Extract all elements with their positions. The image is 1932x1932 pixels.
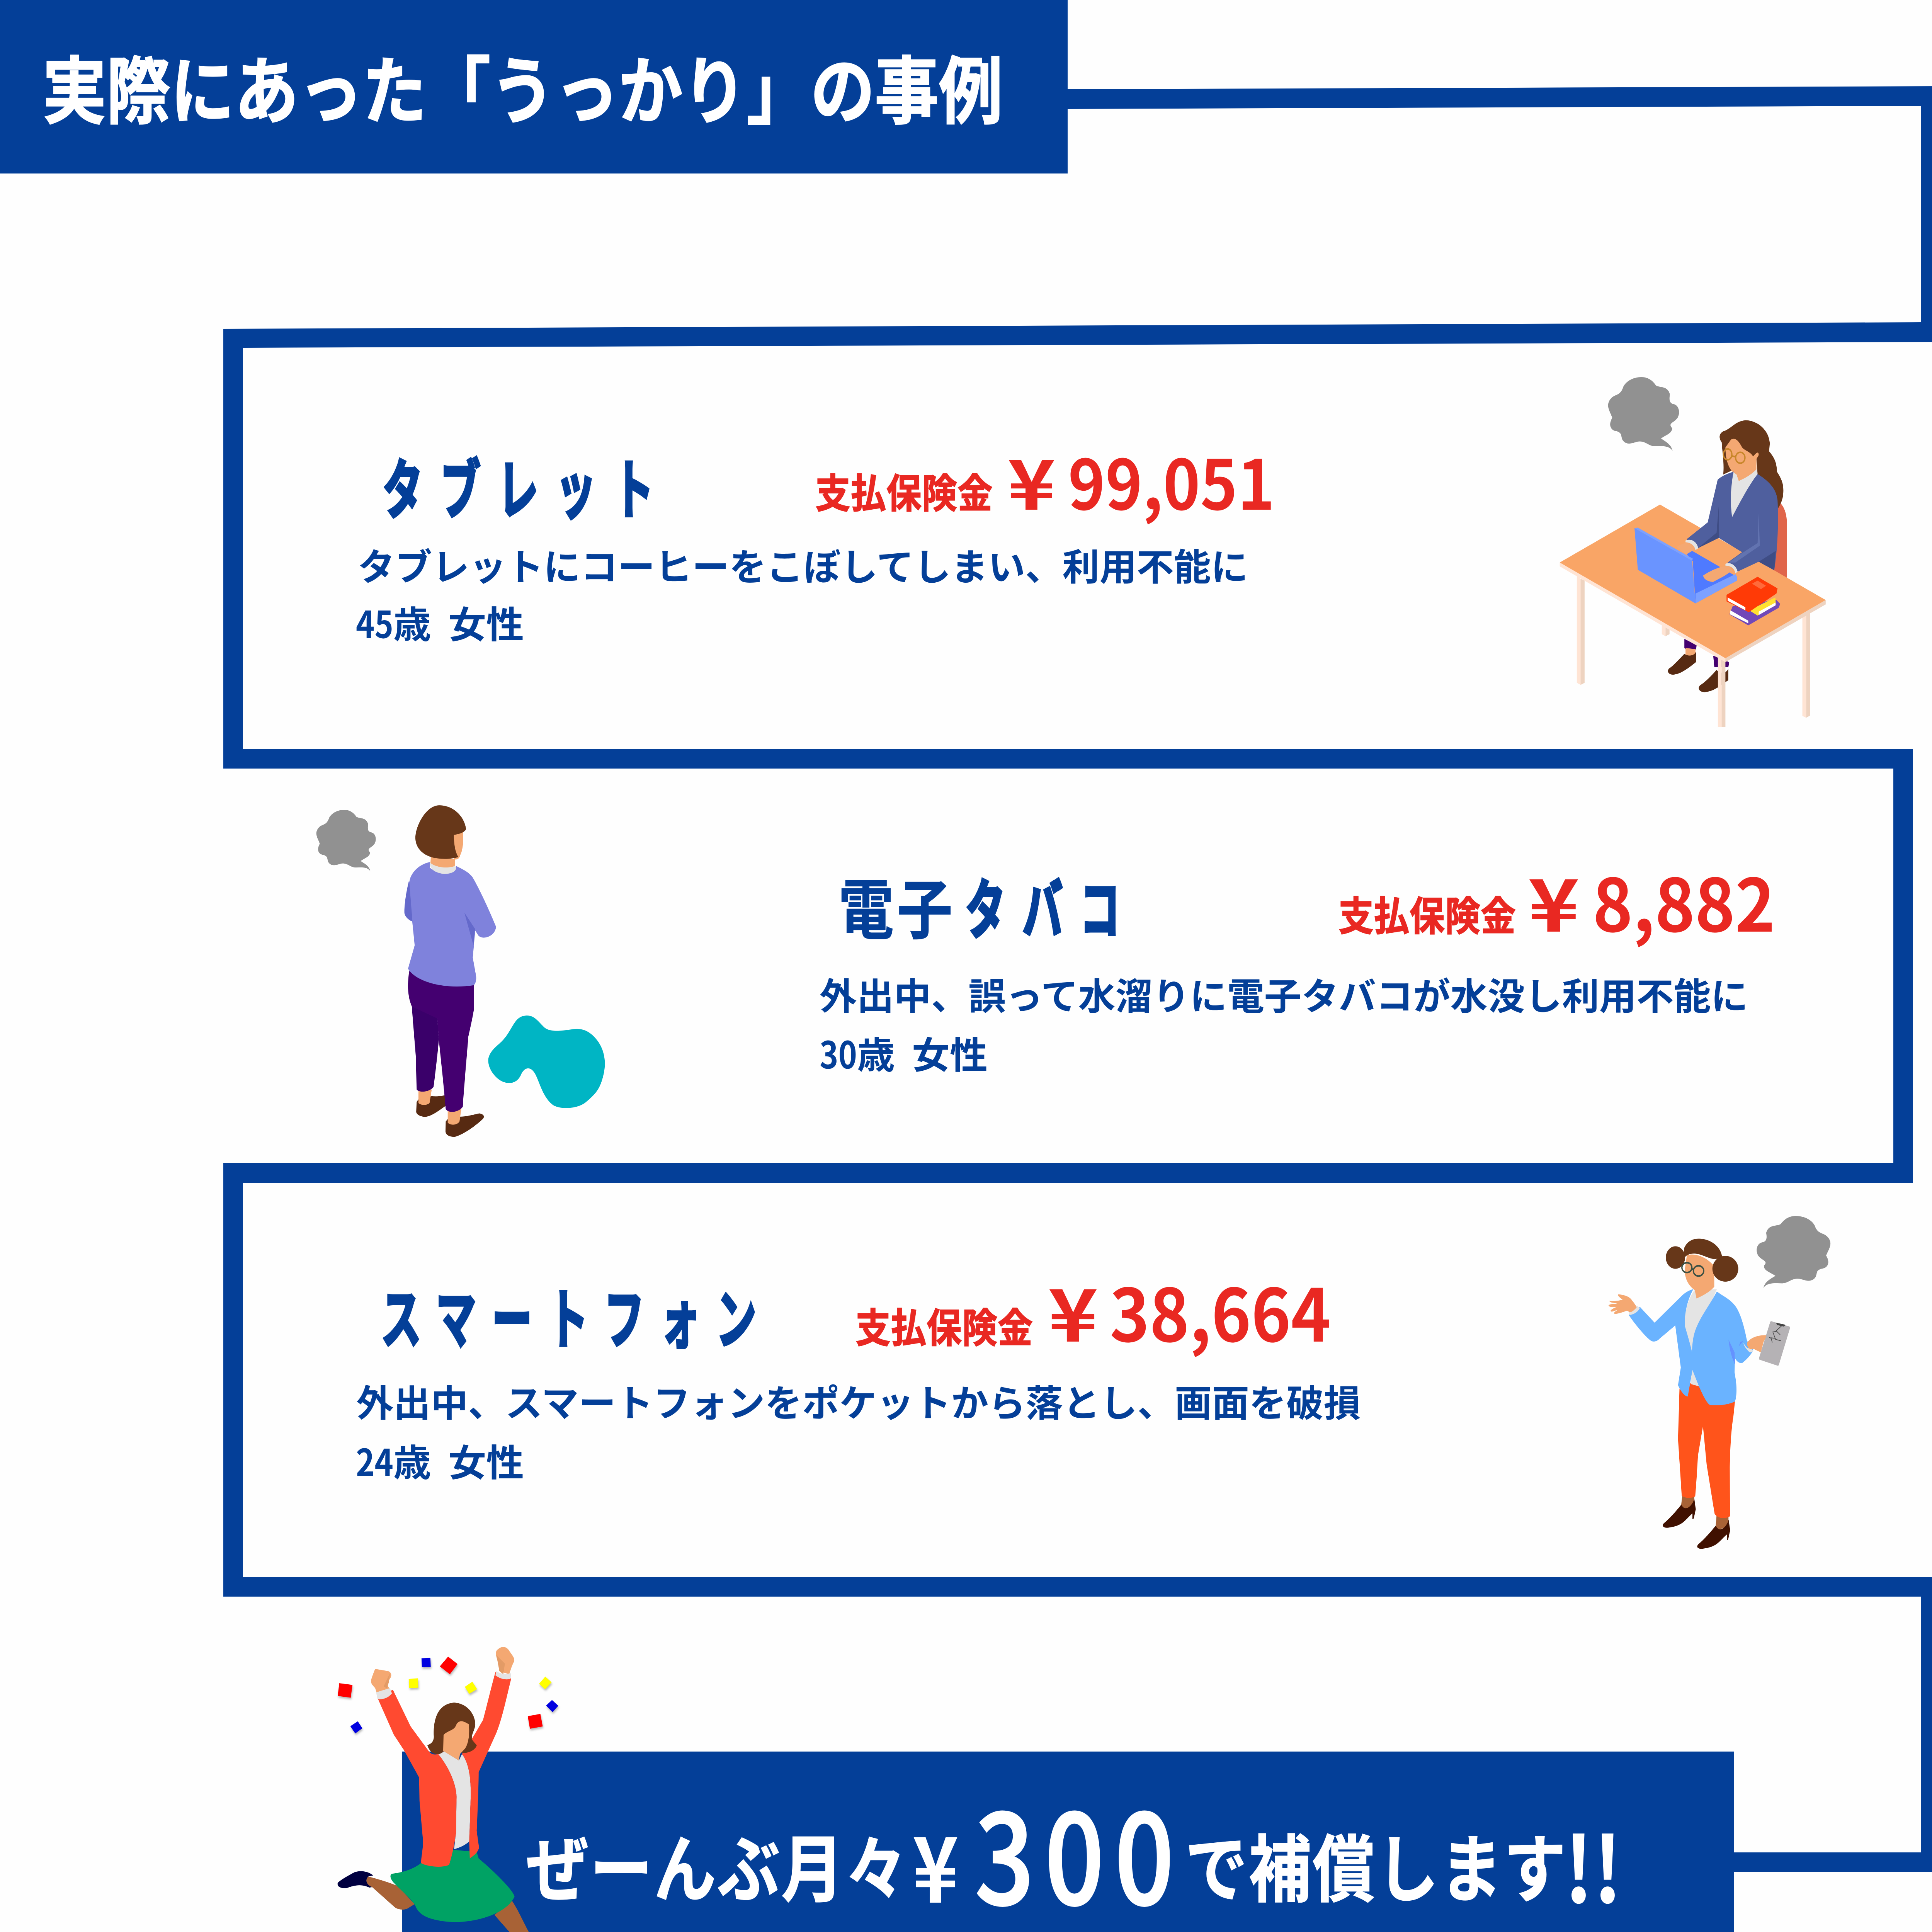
icon: smoke cloud, tablet case bbox=[1608, 377, 1679, 451]
hair bbox=[1719, 420, 1783, 509]
glasses bbox=[1723, 449, 1745, 463]
face bbox=[443, 1721, 469, 1760]
panel: smartphone case bbox=[356, 1258, 1361, 1487]
face bbox=[1685, 1255, 1714, 1299]
puddle bbox=[488, 1015, 605, 1108]
closing message: !! bbox=[1564, 1797, 1622, 1929]
heading: e-cigarette: タバコ bbox=[965, 858, 1137, 952]
hands bbox=[1677, 542, 1732, 582]
heading: tablet: タブレット bbox=[383, 438, 671, 532]
books bbox=[1726, 577, 1780, 625]
closing banner bbox=[402, 1752, 1734, 1932]
title: 実際にあった「うっかり」の事例 bbox=[43, 32, 1003, 139]
shirt bbox=[1685, 1289, 1717, 1386]
legs bbox=[366, 1876, 540, 1932]
illustration: woman standing by a puddle bbox=[405, 805, 605, 1137]
left hand bbox=[1609, 1294, 1637, 1314]
cracked phone bbox=[1760, 1323, 1789, 1364]
description: 外出中、スマートフォンをポケットから落とし、画面を破損 bbox=[356, 1374, 1361, 1427]
shoes bbox=[1663, 1499, 1730, 1549]
age and gender: 30 bbox=[820, 1026, 857, 1079]
ankles bbox=[418, 1090, 462, 1125]
illustration: frustrated woman at desk with laptop bbox=[1560, 420, 1826, 727]
age and gender: 45 bbox=[356, 595, 393, 649]
payout amount: ¥ bbox=[1007, 430, 1056, 530]
closing message: ¥ bbox=[912, 1797, 959, 1929]
shoes bbox=[416, 1095, 484, 1137]
icon: smoke cloud, e-cigarette case bbox=[316, 810, 376, 871]
shoes bbox=[338, 1871, 565, 1932]
age and gender: 歳 女性 bbox=[393, 1433, 524, 1487]
illustration: celebrating woman with confetti bbox=[338, 1647, 565, 1932]
face bbox=[1725, 439, 1759, 481]
payout label: 支払保険金 bbox=[855, 1296, 1033, 1354]
icon: smoke cloud, smartphone case bbox=[1757, 1216, 1830, 1288]
payout amount: 38,664 bbox=[1110, 1258, 1331, 1363]
skirt bbox=[390, 1850, 515, 1922]
jacket bbox=[377, 1672, 511, 1867]
confetti bbox=[338, 1656, 558, 1733]
trousers bbox=[408, 971, 474, 1112]
title banner bbox=[0, 0, 1068, 173]
collar bbox=[430, 862, 456, 874]
illustration: woman holding a cracked phone bbox=[1609, 1239, 1789, 1549]
age and gender: 歳 女性 bbox=[857, 1026, 988, 1079]
neck bbox=[430, 857, 455, 869]
closing message: で補償します bbox=[1185, 1810, 1567, 1917]
glasses bbox=[1682, 1263, 1704, 1276]
payout label: 支払保険金 bbox=[1338, 884, 1516, 942]
panel: tablet case bbox=[356, 430, 1275, 649]
heading: smartphone: スマートフォン bbox=[381, 1268, 772, 1362]
laptop bbox=[1634, 527, 1737, 604]
closing message: ぜーんぶ月々 bbox=[526, 1810, 908, 1917]
payout amount: ¥ bbox=[1528, 848, 1580, 953]
cuffs bbox=[1629, 1306, 1753, 1352]
hair bbox=[427, 1702, 477, 1754]
closing message bbox=[526, 1761, 1622, 1932]
description: タブレットにコーヒーをこぼしてしまい、利用不能に bbox=[358, 537, 1248, 591]
desk legs, feet bbox=[1577, 575, 1810, 727]
cuffs bbox=[1685, 540, 1738, 573]
right hand bbox=[1747, 1335, 1766, 1352]
desk top bbox=[1560, 505, 1826, 662]
payout amount: 99,051 bbox=[1068, 430, 1275, 530]
trousers bbox=[1678, 1383, 1735, 1518]
fists bbox=[371, 1647, 514, 1694]
ankles bbox=[1681, 1495, 1728, 1529]
age and gender: 24 bbox=[356, 1433, 393, 1487]
shirt bbox=[438, 1751, 471, 1849]
jacket bbox=[1629, 1289, 1753, 1405]
description: 外出中、誤って水溜りに電子タバコが水没し利用不能に bbox=[820, 967, 1748, 1020]
hair bbox=[1666, 1239, 1738, 1282]
payout amount: 8,882 bbox=[1593, 848, 1775, 953]
shirt bbox=[1731, 469, 1758, 517]
chair bbox=[1773, 500, 1787, 578]
heading: e-cigarette bbox=[838, 858, 1137, 952]
sweater bbox=[405, 862, 496, 986]
face bbox=[454, 832, 463, 859]
cuffs bbox=[376, 1671, 511, 1699]
payout amount: ¥ bbox=[1048, 1258, 1098, 1363]
hair bbox=[415, 805, 466, 859]
age and gender: 歳 女性 bbox=[393, 595, 524, 649]
panel: e-cigarette case bbox=[820, 848, 1775, 1079]
jacket bbox=[1687, 471, 1778, 571]
payout label: 支払保険金 bbox=[815, 462, 993, 520]
heading: e-cigarette: 電子 bbox=[838, 858, 956, 952]
